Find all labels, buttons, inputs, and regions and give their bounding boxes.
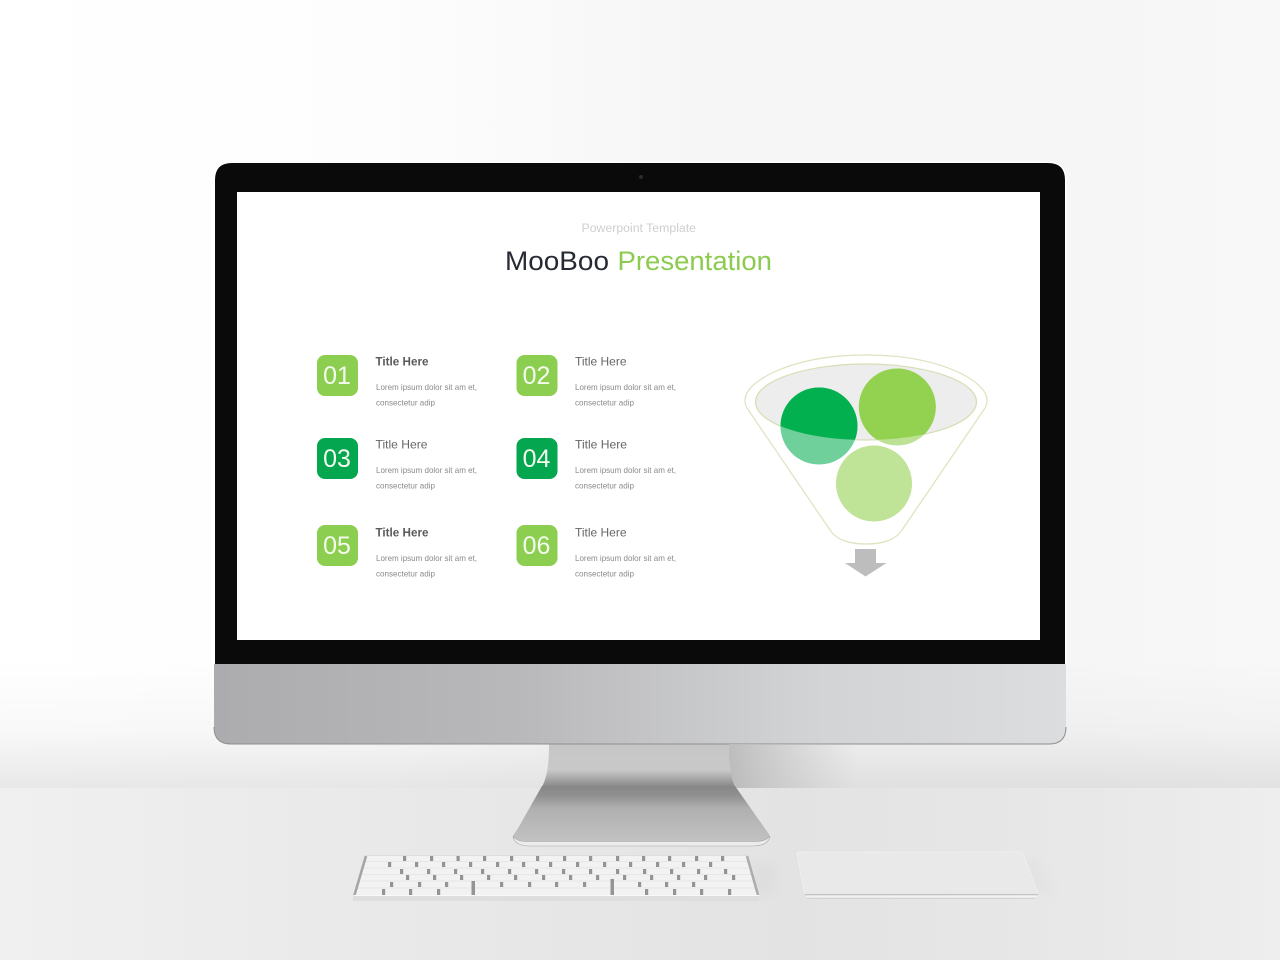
funnel outline (745, 355, 987, 544)
funnel mouth ellipse (756, 364, 976, 440)
item 04: consectetur adip (575, 480, 634, 490)
dark green circle (780, 388, 858, 464)
item 06: Lorem ipsum dolor sit am et, (575, 553, 676, 563)
keyboard shadow (752, 864, 774, 894)
item 01: Title Here (376, 354, 429, 368)
item 03: Title Here (376, 438, 428, 452)
monitor (214, 162, 1066, 744)
monitor black bezel (215, 163, 1065, 664)
background: desk surface (0, 788, 1280, 960)
keyboard (353, 855, 774, 901)
funnel diagram (745, 355, 987, 576)
item 01: consectetur adip (376, 398, 435, 408)
slide title: Presentation (618, 246, 772, 276)
item 06 (516, 525, 676, 578)
item 02: Title Here (575, 354, 627, 368)
item 03: Lorem ipsum dolor sit am et, (376, 465, 477, 475)
item 04: Title Here (575, 438, 627, 452)
item 02 (516, 354, 676, 408)
item 02: consectetur adip (575, 398, 634, 408)
item 04: Lorem ipsum dolor sit am et, (575, 465, 676, 475)
item 01: Lorem ipsum dolor sit am et, (376, 382, 477, 392)
item 03 (317, 438, 477, 490)
item 04: 04 (523, 445, 550, 473)
trackpad front edge (805, 894, 1038, 896)
shadow on wall behind stand (728, 745, 858, 788)
item 04 (516, 438, 676, 490)
keyboard key gaps (382, 856, 735, 895)
down arrow (845, 549, 886, 576)
monitor chin (214, 664, 1066, 744)
item 06: Title Here (575, 526, 627, 540)
item 01 (317, 354, 477, 408)
item 02: Lorem ipsum dolor sit am et, (575, 382, 676, 392)
item 05: Lorem ipsum dolor sit am et, (376, 553, 477, 563)
monitor stand (513, 744, 770, 846)
item 06: consectetur adip (575, 568, 634, 578)
item 03: consectetur adip (376, 480, 435, 490)
item 06: 06 (523, 532, 550, 560)
slide subtitle: Powerpoint Template (582, 223, 696, 235)
trackpad (797, 852, 1050, 898)
wall shading above desk (0, 660, 1280, 788)
slide screen (237, 192, 1040, 640)
webcam (639, 175, 643, 179)
slide title: MooBoo (505, 246, 609, 276)
item 05 (317, 525, 477, 578)
light green circle (859, 368, 936, 446)
item 05: 05 (323, 532, 351, 560)
slide title (505, 246, 772, 276)
trackpad surface (797, 852, 1037, 894)
item 05: consectetur adip (376, 568, 435, 578)
item 01: 01 (323, 362, 351, 390)
item 05: Title Here (376, 526, 429, 540)
item 03: 03 (323, 445, 351, 473)
monitor halo (214, 162, 1066, 666)
pale green circle (836, 446, 912, 522)
chin bottom edge (214, 727, 1066, 744)
item 02: 02 (523, 362, 550, 390)
trackpad shadow (1024, 860, 1050, 892)
keyboard body (353, 855, 759, 901)
